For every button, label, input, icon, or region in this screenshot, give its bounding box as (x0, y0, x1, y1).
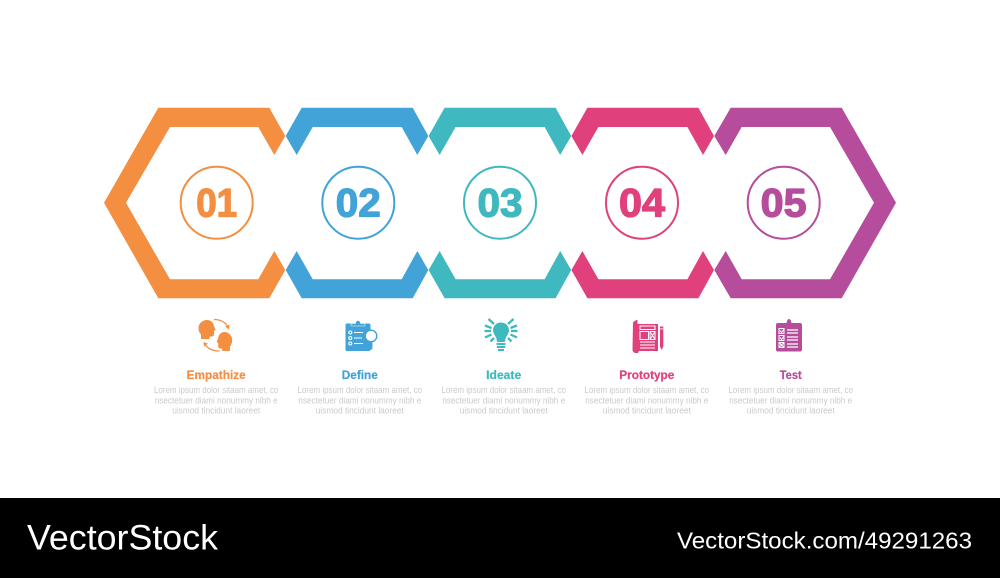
description: uismod tincidunt laoreet (172, 405, 261, 415)
hexagon segment: blue (286, 108, 428, 298)
icon: blueprint and pencil (632, 320, 663, 353)
description: nsectetuer diami nonummy nibh e (729, 395, 852, 405)
description: Lorem ipsum dolor sitaam amet, co (441, 385, 566, 395)
description: Lorem ipsum dolor sitaam amet, co (728, 385, 853, 395)
description (154, 385, 278, 415)
hexagon segment: purple (714, 108, 896, 298)
description: uismod tincidunt laoreet (316, 405, 404, 415)
description: nsectetuer diami nonummy nibh e (298, 395, 421, 405)
title: Test (780, 370, 802, 382)
number badge 04: 04 (619, 182, 666, 226)
step 2: Define (286, 108, 428, 415)
number badge 02 (322, 167, 394, 239)
description: Lorem ipsum dolor sitaam amet, co (585, 385, 709, 395)
hexagon segment: orange (104, 108, 285, 298)
description (298, 385, 422, 415)
title: Define (342, 370, 378, 382)
title: Empathize (187, 370, 246, 382)
description: nsectetuer diami nonummy nibh e (155, 395, 278, 405)
description: nsectetuer diami nonummy nibh e (585, 395, 708, 405)
description: uismod tincidunt laoreet (460, 405, 548, 415)
description (585, 385, 709, 415)
image reference: VectorStock.com/49291263 (677, 528, 972, 554)
icon: clipboard with magnifier (346, 320, 377, 351)
description (728, 385, 853, 415)
number badge 05: 05 (761, 182, 807, 226)
description: uismod tincidunt laoreet (603, 405, 691, 415)
hexagon segment: pink (571, 108, 714, 298)
number badge 02: 02 (336, 182, 381, 226)
number badge 04 (606, 167, 678, 239)
step 5: Test (714, 108, 896, 415)
number badge 01: 01 (196, 182, 237, 226)
description (441, 385, 566, 415)
title: Ideate (486, 370, 521, 382)
description: uismod tincidunt laoreet (747, 405, 835, 415)
icon: two heads exchanging (198, 320, 232, 351)
title: Prototype (619, 370, 674, 382)
watermark footer band (0, 498, 1000, 578)
number badge 03: 03 (478, 182, 522, 226)
step 1: Empathize (104, 108, 285, 415)
number badge 01 (181, 167, 253, 239)
step 3: Ideate (429, 108, 571, 415)
icon: checklist clipboard (776, 319, 802, 352)
step 4: Prototype (571, 108, 714, 415)
description: nsectetuer diami nonummy nibh e (442, 395, 565, 405)
hexagon segment: teal (429, 108, 571, 298)
number badge 03 (464, 167, 536, 239)
description: Lorem ipsum dolor sitaam amet, co (154, 385, 278, 395)
icon: light bulb (484, 319, 518, 351)
description: Lorem ipsum dolor sitaam amet, co (298, 385, 422, 395)
number badge 05 (748, 167, 820, 239)
brand name: VectorStock (27, 518, 219, 558)
